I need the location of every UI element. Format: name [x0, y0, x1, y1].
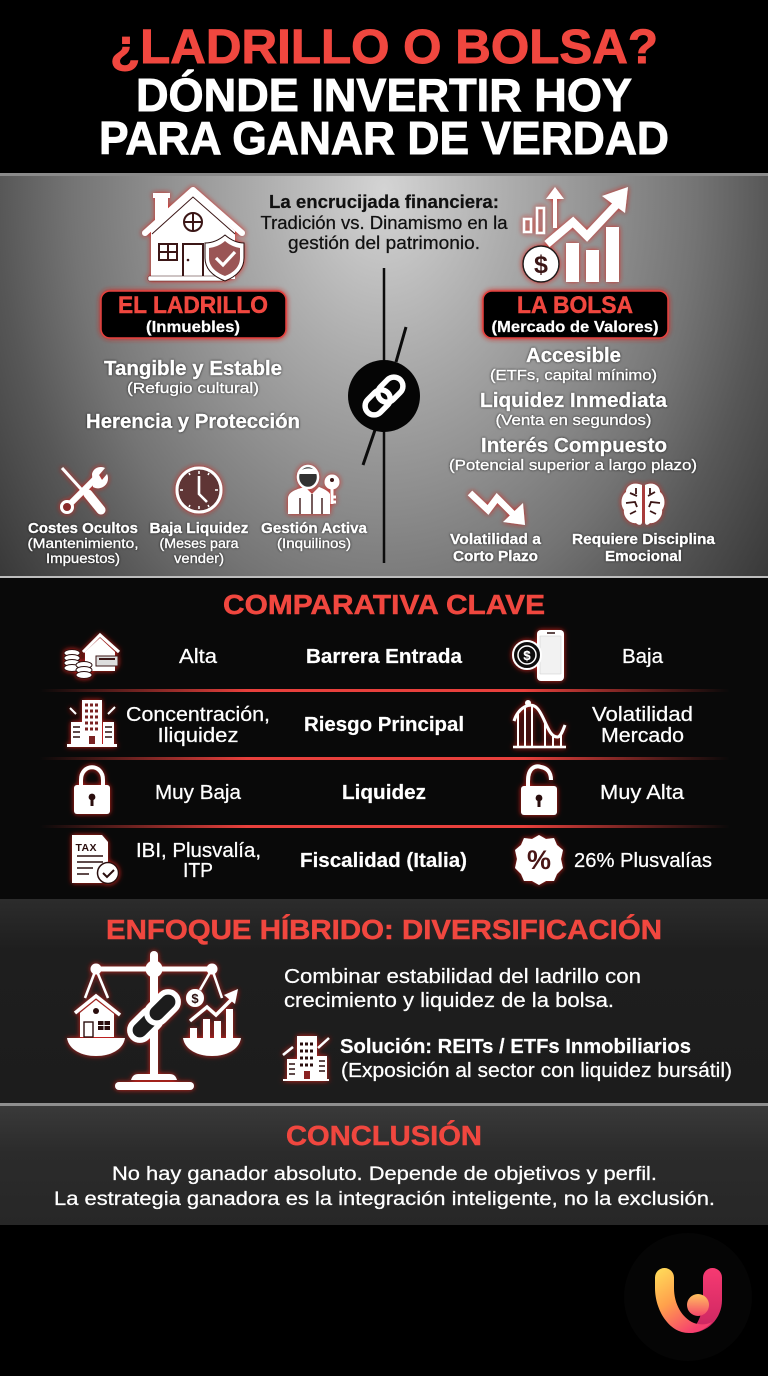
- row: fiscalidad: 26% Plusvalías: [574, 850, 712, 872]
- row: barrera entrada: Alta: [179, 646, 218, 668]
- row: barrera entrada: Baja: [622, 646, 664, 668]
- conclusion text: [54, 1164, 715, 1210]
- conclusion text: No hay ganador absoluto. Depende de objetivos y perfil.: [112, 1164, 657, 1185]
- ladrillo benefits: Tangible y Estable: [104, 358, 282, 380]
- ladrillo drawbacks text: [28, 521, 368, 566]
- intro text: [260, 192, 509, 253]
- icon: phone with coin: [513, 630, 564, 681]
- mini chart: [186, 989, 238, 1038]
- icon: falling arrow: [470, 493, 525, 525]
- bolsa drawbacks text: Requiere Disciplina: [572, 532, 716, 548]
- badge: el ladrillo: [101, 291, 286, 338]
- heading: conclusion: CONCLUSIÓN: [286, 1120, 482, 1151]
- panel: ladrillo vs bolsa: [0, 173, 768, 578]
- ladrillo drawbacks text: (Inquilinos): [277, 536, 351, 551]
- row: riesgo principal: Iliquidez: [158, 725, 238, 747]
- icon: tools: [62, 467, 108, 512]
- divider with chain link: [348, 268, 420, 563]
- row: fiscalidad: [72, 835, 712, 885]
- ladrillo benefits: [86, 358, 300, 433]
- row: riesgo principal: Concentración,: [126, 704, 270, 726]
- ladrillo benefits: Herencia y Protección: [86, 411, 300, 433]
- row: riesgo principal: [67, 700, 693, 747]
- solution text: Solución: REITs / ETFs Inmobiliarios: [340, 1036, 691, 1058]
- row: fiscalidad: IBI, Plusvalía,: [136, 840, 261, 862]
- hybrid description: crecimiento y liquidez de la bolsa.: [284, 990, 614, 1012]
- title line 2: DÓNDE INVERTIR HOY: [136, 69, 632, 121]
- icon: house with shield: [145, 190, 244, 281]
- icon: open lock: [521, 766, 557, 815]
- bolsa benefits: Accesible: [526, 345, 621, 367]
- bolsa benefits: (Venta en segundos): [496, 412, 652, 429]
- bolsa drawbacks text: Corto Plazo: [453, 549, 538, 565]
- title line 1: ¿LADRILLO O BOLSA?: [110, 21, 658, 74]
- hybrid description: Combinar estabilidad del ladrillo con: [284, 966, 641, 988]
- ladrillo drawbacks text: Impuestos): [46, 551, 120, 566]
- icon: brain: [622, 484, 664, 525]
- row: liquidez: Liquidez: [342, 782, 426, 804]
- mini chart: $: [191, 991, 199, 1006]
- ladrillo drawbacks text: (Mantenimiento,: [28, 536, 138, 551]
- icon: closed lock: [74, 767, 110, 814]
- solution text: [340, 1036, 732, 1082]
- bolsa benefits: Interés Compuesto: [481, 435, 667, 457]
- icon: clock: [177, 468, 221, 512]
- icon: growing buildings: [283, 1036, 329, 1081]
- ladrillo drawbacks text: (Meses para: [160, 536, 239, 551]
- icon: stock chart with coin: $: [534, 251, 548, 279]
- panel: comparativa clave: [0, 578, 768, 899]
- row: fiscalidad: Fiscalidad (Italia): [300, 850, 467, 872]
- bolsa benefits: (ETFs, capital mínimo): [490, 367, 657, 384]
- title line 3: PARA GANAR DE VERDAD: [99, 112, 669, 164]
- icon: tax document: TAX: [76, 842, 96, 854]
- hybrid description: [284, 966, 641, 1012]
- intro text: La encrucijada financiera:: [269, 192, 499, 212]
- row: barrera entrada: Barrera Entrada: [306, 646, 463, 668]
- icon: buildings with arrows: [67, 700, 117, 747]
- badge: la bolsa: (Mercado de Valores): [492, 319, 658, 336]
- ladrillo drawbacks text: Costes Ocultos: [28, 521, 138, 537]
- panel: conclusion: [0, 1103, 768, 1225]
- logo: [624, 1233, 752, 1361]
- bolsa drawbacks text: [450, 532, 716, 565]
- icon: manager with key: [288, 466, 340, 514]
- badge: el ladrillo: (Inmuebles): [146, 319, 240, 336]
- intro text: Tradición vs. Dinamismo en la: [260, 213, 509, 233]
- icon: house and coins: [64, 635, 119, 678]
- row: liquidez: Muy Baja: [155, 782, 242, 804]
- badge: el ladrillo: EL LADRILLO: [118, 292, 268, 319]
- icon: tax document: [72, 835, 118, 884]
- bolsa drawbacks text: Emocional: [605, 549, 682, 565]
- heading: comparativa: COMPARATIVA CLAVE: [223, 589, 545, 620]
- bolsa drawbacks text: Volatilidad a: [450, 532, 542, 548]
- badge: la bolsa: LA BOLSA: [517, 292, 633, 319]
- icon: roller coaster: [513, 700, 566, 747]
- badge: la bolsa: [483, 291, 668, 338]
- ladrillo benefits: (Refugio cultural): [127, 380, 259, 397]
- icon: percent badge: [515, 835, 563, 885]
- icon: balance scale: [67, 951, 241, 1090]
- header: title: [0, 0, 768, 173]
- bolsa benefits: Liquidez Inmediata: [480, 390, 668, 412]
- row: barrera entrada: [64, 630, 664, 681]
- ladrillo drawbacks text: vender): [174, 551, 224, 566]
- icon: phone with coin: $: [523, 648, 531, 663]
- row: fiscalidad: ITP: [183, 860, 213, 882]
- solution text: (Exposición al sector con liquidez bursátil): [341, 1060, 732, 1082]
- row: riesgo principal: Volatilidad: [592, 704, 693, 726]
- icon: percent badge: %: [527, 845, 551, 875]
- bolsa benefits: (Potencial superior a largo plazo): [449, 457, 697, 474]
- row: riesgo principal: Mercado: [601, 725, 684, 747]
- row: riesgo principal: Riesgo Principal: [304, 714, 464, 736]
- ladrillo drawbacks text: Gestión Activa: [261, 521, 368, 537]
- bolsa benefits: [449, 345, 697, 474]
- heading: enfoque hibrido: ENFOQUE HÍBRIDO: DIVERSIFICACIÓN: [106, 914, 662, 945]
- ladrillo drawbacks text: Baja Liquidez: [150, 521, 248, 537]
- panel: enfoque hibrido: [0, 899, 768, 1104]
- mini house: [75, 996, 120, 1037]
- row: liquidez: [74, 766, 685, 815]
- intro text: gestión del patrimonio.: [288, 233, 480, 253]
- row: liquidez: Muy Alta: [600, 782, 685, 804]
- conclusion text: La estrategia ganadora es la integración inteligente, no la exclusión.: [54, 1189, 715, 1210]
- icon: stock chart with coin: [523, 187, 628, 282]
